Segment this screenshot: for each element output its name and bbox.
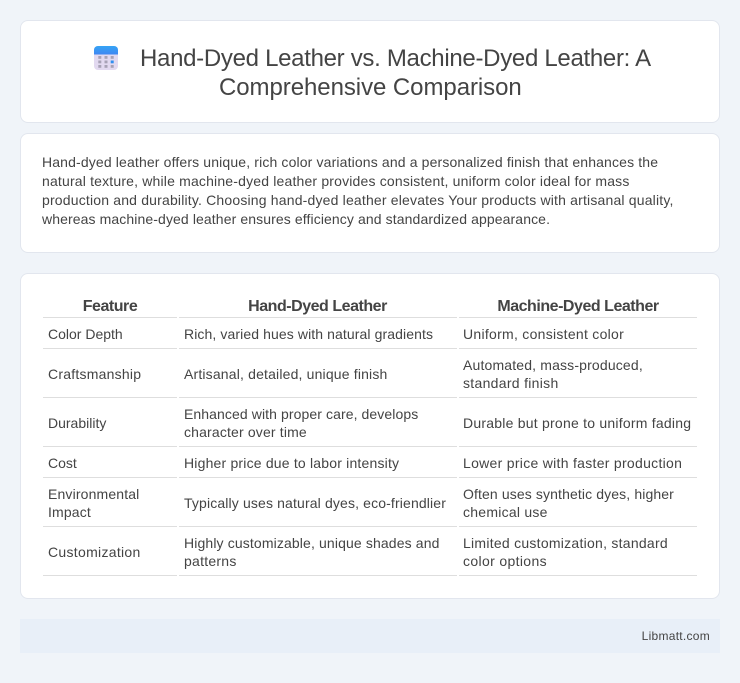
panel: title card [20,20,720,123]
row: Durability: character over time [184,424,307,440]
icon: calendar [94,46,118,70]
row: Color Depth: Rich, varied hues with natural gradients [184,326,433,342]
row: Color Depth [48,326,624,342]
row: Environmental Impact [48,486,674,520]
intro paragraph: whereas machine-dyed leather ensures efficiency and standardized appearance. [42,211,550,227]
row: Cost: Lower price with faster production [463,455,682,471]
row: Customization: patterns [184,553,237,569]
row: Environmental Impact: Environmental [48,486,139,502]
row: Color Depth: Uniform, consistent color [463,326,624,342]
row: Customization: color options [463,553,547,569]
row: Cost [48,455,682,471]
intro paragraph [42,154,674,227]
row: Durability: Durability [48,415,106,431]
row: Customization [48,535,668,569]
row: Customization: Limited customization, standard [463,535,668,551]
footer text: Libmatt.com [642,629,710,643]
row: Durability: Enhanced with proper care, develops [184,406,418,422]
footer bar [20,619,720,653]
title [140,45,651,101]
row: Environmental Impact: chemical use [463,504,548,520]
row: Cost: Cost [48,455,77,471]
row: Environmental Impact: Typically uses natural dyes, eco-friendlier [184,495,446,511]
title: Hand-Dyed Leather vs. Machine-Dyed Leather: A [140,45,651,72]
intro paragraph: natural texture, while machine-dyed leather provides consistent, uniform color ideal for mass [42,173,630,189]
panel: comparison table card [20,273,720,599]
column header: Machine-Dyed Leather: Machine-Dyed Leather [497,298,659,315]
title: Comprehensive Comparison [219,74,522,101]
row: Customization: Customization [48,544,141,560]
row: Craftsmanship: Craftsmanship [48,366,141,382]
column header: Hand-Dyed Leather: Hand-Dyed Leather [248,298,387,315]
panel: intro paragraph card [20,133,720,253]
row: Durability [48,406,691,440]
comparison table [43,298,697,576]
intro paragraph: Hand-dyed leather offers unique, rich color variations and a personalized finish that enhances the [42,154,658,170]
row: Cost: Higher price due to labor intensity [184,455,399,471]
row: Customization: Highly customizable, unique shades and [184,535,440,551]
row: Craftsmanship: Automated, mass-produced, [463,357,643,373]
row: Environmental Impact: Impact [48,504,91,520]
row: Craftsmanship: standard finish [463,375,559,391]
row: Durability: Durable but prone to uniform fading [463,415,691,431]
intro paragraph: production and durability. Choosing hand-dyed leather elevates Your products with artisanal quality, [42,192,674,208]
row: Craftsmanship [48,357,643,391]
column header: Feature: Feature [83,298,137,315]
row: Environmental Impact: Often uses synthetic dyes, higher [463,486,674,502]
row: Color Depth: Color Depth [48,326,123,342]
row: Craftsmanship: Artisanal, detailed, unique finish [184,366,387,382]
